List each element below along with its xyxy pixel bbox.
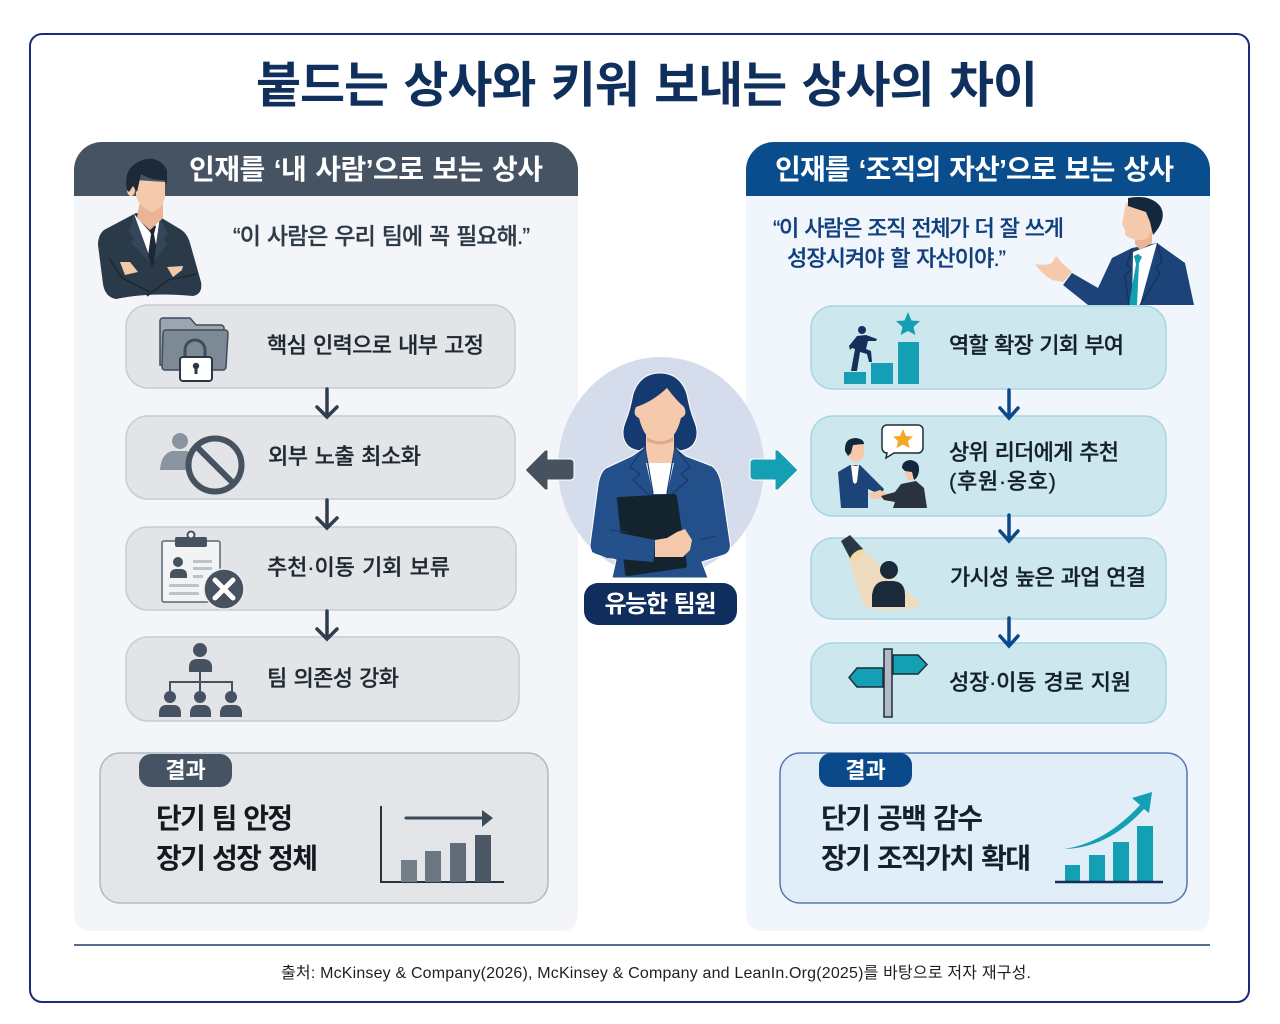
card text: 가시성 높은 과업 연결 [950, 565, 1146, 590]
icon: signpost [849, 649, 927, 717]
card: visible assignments [811, 535, 1166, 619]
card text: 역할 확장 기회 부여 [949, 333, 1124, 358]
card: recommendation to leaders [811, 416, 1166, 516]
left panel header [74, 142, 578, 196]
icon: person climbing steps to star [844, 312, 920, 384]
center: talented team member [558, 357, 764, 625]
result box left [100, 753, 548, 903]
card text: (후원·옹호) [949, 469, 1056, 494]
result text: 장기 조직가치 확대 [821, 843, 1031, 874]
right panel body [746, 190, 1210, 931]
panel: right boss [746, 142, 1210, 931]
right panel heading: 인재를 ‘조직의 자산’으로 보는 상사 [775, 154, 1174, 185]
card: team dependency [126, 637, 519, 721]
card text: 성장·이동 경로 지원 [949, 670, 1131, 695]
figure: man with open hand [1035, 197, 1194, 305]
card text: 상위 리더에게 추천 [949, 440, 1119, 465]
source note: 출처: McKinsey & Company(2026), McKinsey & Company and LeanIn.Org(2025)를 바탕으로 저자 재구성. [281, 964, 1031, 982]
result text: 단기 팀 안정 [156, 803, 293, 834]
left panel heading: 인재를 ‘내 사람’으로 보는 상사 [189, 154, 543, 185]
right panel header [746, 142, 1210, 196]
result text: 단기 공백 감수 [821, 803, 983, 834]
right quote [773, 216, 1064, 271]
card: recommendation on hold [126, 527, 516, 610]
right quote: “이 사람은 조직 전체가 더 잘 쓰게 [773, 216, 1064, 241]
chart: flat bars with arrow [381, 806, 504, 882]
chart: rising bars with arrow [1055, 792, 1163, 882]
card text [949, 440, 1119, 494]
icon: org chart [159, 643, 242, 717]
figure: woman holding tablet [590, 373, 730, 578]
card text: 팀 의존성 강화 [267, 666, 399, 691]
card: role expansion [811, 306, 1166, 389]
icon: person with prohibition sign [160, 433, 242, 492]
arrow: down 1 [317, 389, 337, 417]
card text: 추천·이동 기회 보류 [267, 555, 450, 580]
arrow: left gray [525, 450, 574, 490]
card: minimal exposure [126, 416, 515, 499]
panel: left boss [74, 142, 578, 931]
left quote: “이 사람은 우리 팀에 꼭 필요해.” [233, 223, 530, 249]
result text [156, 803, 318, 874]
result box right [780, 753, 1187, 903]
right quote: 성장시켜야 할 자산이야.” [787, 246, 1006, 271]
arrow: right teal [750, 450, 798, 490]
icon: profile clipboard with X [162, 532, 244, 609]
background circle [558, 357, 764, 577]
arrow: down 3 [317, 611, 337, 639]
label pill: 유능한 팀원 [604, 591, 716, 618]
left panel body [74, 190, 578, 931]
icon: person under spotlight [841, 535, 921, 610]
result text [821, 803, 1031, 874]
figure: man with crossed arms [98, 159, 201, 299]
arrow: down 2 [317, 500, 337, 528]
title: 붙드는 상사와 키워 보내는 상사의 차이 [256, 59, 1038, 113]
result badge [139, 754, 232, 787]
result badge: 결과 [845, 758, 886, 783]
icon: locked folder [160, 318, 228, 381]
arrow: down right 1 [1000, 390, 1018, 418]
label pill [584, 583, 737, 625]
result text: 장기 성장 정체 [156, 843, 318, 874]
arrow: down right 2 [1000, 515, 1018, 541]
result badge: 결과 [165, 758, 206, 783]
arrow: down right 3 [1000, 618, 1018, 646]
footer rule [74, 944, 1210, 946]
result badge [819, 753, 912, 787]
card: career path [811, 643, 1166, 723]
card: internal lock-in [126, 305, 515, 388]
card text: 핵심 인력으로 내부 고정 [267, 333, 484, 358]
icon: handshake with star bubble [838, 425, 927, 508]
card text: 외부 노출 최소화 [268, 444, 421, 469]
